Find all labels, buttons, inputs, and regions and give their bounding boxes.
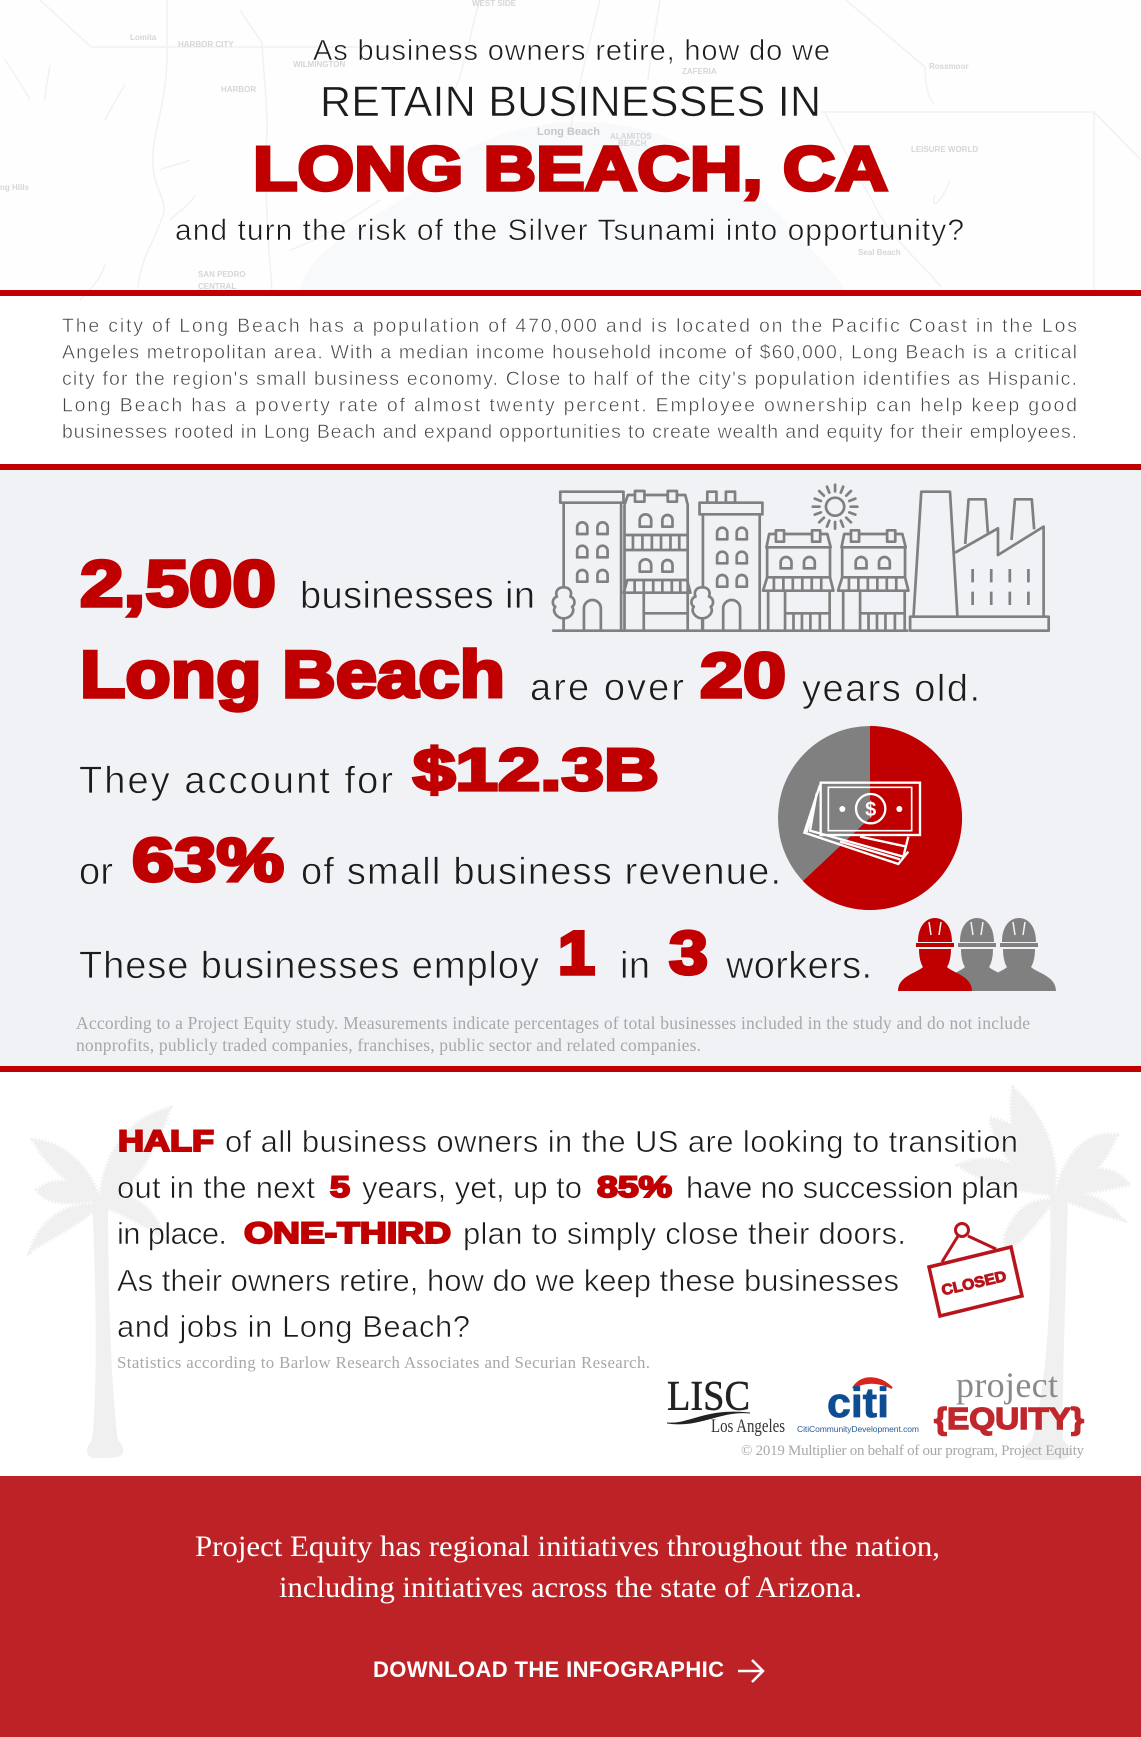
copyright: © 2019 Multiplier on behalf of our program, Project Equity bbox=[741, 1443, 1084, 1459]
title line 1: As business owners retire, how do we bbox=[313, 35, 830, 67]
stat line: $12.3B: $12.3B bbox=[413, 737, 659, 803]
stat line: Long Beach over 20 years: Long Beach bbox=[80, 637, 505, 711]
stat line: 1 in 3 workers: in bbox=[620, 945, 650, 987]
map background: ALAMITOS bbox=[610, 132, 652, 141]
map background: CENTRAL bbox=[198, 282, 236, 291]
intro paragraph: The city of Long Beach has a population of 470,000 and is located on the Pacific Coast in the Los bbox=[62, 315, 1077, 337]
logo: citi: CitiCommunityDevelopment.com bbox=[797, 1424, 919, 1434]
map background: ng Hills bbox=[0, 183, 29, 192]
line 2: 85% bbox=[597, 1171, 672, 1204]
icon: closed sign: CLOSED bbox=[940, 1268, 1008, 1299]
panel: call to action bbox=[0, 1476, 1141, 1737]
panel: half of owners text bbox=[117, 1124, 1019, 1372]
footnote bbox=[76, 1013, 1030, 1055]
call to action text bbox=[195, 1530, 940, 1604]
stat line: 1 in 3 workers bbox=[79, 919, 872, 987]
icon: money: $ bbox=[865, 799, 876, 821]
source note: Statistics according to Barlow Research Associates and Securian Research. bbox=[117, 1353, 650, 1372]
map background: ZAFERIA bbox=[682, 67, 717, 76]
logo: LISC Los Angeles bbox=[667, 1374, 785, 1437]
line 2: years, yet, up to bbox=[362, 1170, 582, 1205]
map background: HARBOR bbox=[221, 85, 256, 94]
logo: citi: citi bbox=[827, 1379, 889, 1426]
title line 3: LONG BEACH, CA bbox=[253, 135, 888, 204]
line 1: of all business owners in the US are looking to transition bbox=[225, 1124, 1018, 1159]
stat line: $12.3B bbox=[79, 737, 659, 803]
line 2: out in the next bbox=[117, 1170, 315, 1205]
intro paragraph bbox=[62, 315, 1077, 443]
line 3: ONE-THIRD bbox=[244, 1217, 451, 1250]
map background: Seal Beach bbox=[858, 248, 901, 257]
logo: LISC Los Angeles: LISC bbox=[667, 1374, 750, 1420]
icon: arrow bbox=[738, 1660, 763, 1682]
map background: HARBOR CITY bbox=[178, 40, 234, 49]
map background: WILMINGTON bbox=[293, 60, 346, 69]
title line 2: RETAIN BUSINESSES IN bbox=[320, 78, 821, 126]
stat line: 1 in 3 workers: workers. bbox=[725, 945, 872, 987]
stat line: 1 in 3 workers: These businesses employ bbox=[79, 945, 539, 987]
title line 4: and turn the risk of the Silver Tsunami into opportunity? bbox=[175, 214, 964, 247]
download link: DOWNLOAD THE INFOGRAPHIC bbox=[373, 1657, 724, 1682]
line 3: in place. bbox=[117, 1216, 227, 1251]
stat line: Long Beach over 20 years bbox=[80, 637, 980, 711]
title bbox=[175, 35, 964, 247]
map background bbox=[0, 0, 1141, 300]
stat line: 2,500 businesses: 2,500 bbox=[80, 547, 276, 620]
line 4: As their owners retire, how do we keep these businesses bbox=[117, 1263, 899, 1298]
line 3 bbox=[117, 1216, 906, 1251]
icon: money bbox=[804, 783, 920, 864]
line 5: and jobs in Long Beach? bbox=[117, 1309, 470, 1344]
stat line: 1 in 3 workers: 1 bbox=[558, 919, 595, 987]
call to action text: Project Equity has regional initiatives throughout the nation, bbox=[195, 1530, 940, 1563]
stat line: 2,500 businesses: businesses in bbox=[300, 575, 535, 617]
stat line: Long Beach over 20 years: 20 bbox=[700, 641, 786, 711]
chart: 63% pie bbox=[778, 726, 962, 910]
logo: project equity bbox=[934, 1365, 1084, 1436]
stat line: Long Beach over 20 years: are over bbox=[530, 667, 684, 709]
icon: left palm tree bbox=[30, 1108, 170, 1458]
stat line: 63%: of small business revenue. bbox=[301, 851, 781, 893]
stat line: 2,500 businesses bbox=[80, 547, 535, 620]
intro paragraph: Angeles metropolitan area. With a median income household income of $60,000, Long Beach is a critical bbox=[62, 342, 1077, 364]
map background: Long Beach bbox=[537, 126, 600, 138]
stat line: $12.3B: They account for bbox=[79, 760, 393, 802]
panel: statistics bbox=[0, 464, 1141, 1072]
map background: SAN PEDRO bbox=[198, 270, 246, 279]
stat line: 63% bbox=[79, 826, 781, 894]
stat line: 63%: 63% bbox=[132, 826, 284, 894]
logo: citi bbox=[797, 1378, 919, 1434]
intro paragraph: businesses rooted in Long Beach and expand opportunities to create wealth and equity for their employees. bbox=[62, 421, 1077, 443]
intro paragraph: Long Beach has a poverty rate of almost twenty percent. Employee ownership can help keep good bbox=[62, 394, 1077, 416]
logo: project equity: {EQUITY} bbox=[934, 1401, 1084, 1436]
line 2: 5 bbox=[330, 1171, 350, 1204]
logo: LISC Los Angeles: Los Angeles bbox=[711, 1416, 785, 1437]
map background: Lomita bbox=[130, 33, 157, 42]
stat line: Long Beach over 20 years: years old. bbox=[802, 668, 980, 710]
footnote: nonprofits, publicly traded companies, franchises, public sector and related companies. bbox=[76, 1035, 701, 1055]
map background: Rossmoor bbox=[929, 62, 969, 71]
call to action text: including initiatives across the state of Arizona. bbox=[279, 1571, 862, 1604]
icon: right palm tree bbox=[958, 1088, 1130, 1460]
map background: LEISURE WORLD bbox=[911, 145, 978, 154]
footnote: According to a Project Equity study. Measurements indicate percentages of total businesses included in the study and do not include bbox=[76, 1013, 1030, 1033]
intro paragraph: city for the region's small business economy. Close to half of the city's population identifies as Hispanic. bbox=[62, 368, 1077, 390]
stat line: 63%: or bbox=[79, 851, 113, 893]
icon: workers bbox=[898, 918, 1056, 991]
map background: BEACH bbox=[618, 139, 647, 148]
line 2 bbox=[117, 1170, 1019, 1205]
icon: closed sign bbox=[929, 1224, 1022, 1316]
line 2: have no succession plan bbox=[686, 1170, 1019, 1205]
logo: project equity: project bbox=[956, 1365, 1058, 1405]
icon: city skyline bbox=[552, 485, 1049, 631]
stat line: 1 in 3 workers: 3 bbox=[669, 919, 708, 987]
line 1: HALF bbox=[118, 1125, 214, 1158]
line 3: plan to simply close their doors. bbox=[463, 1216, 906, 1251]
